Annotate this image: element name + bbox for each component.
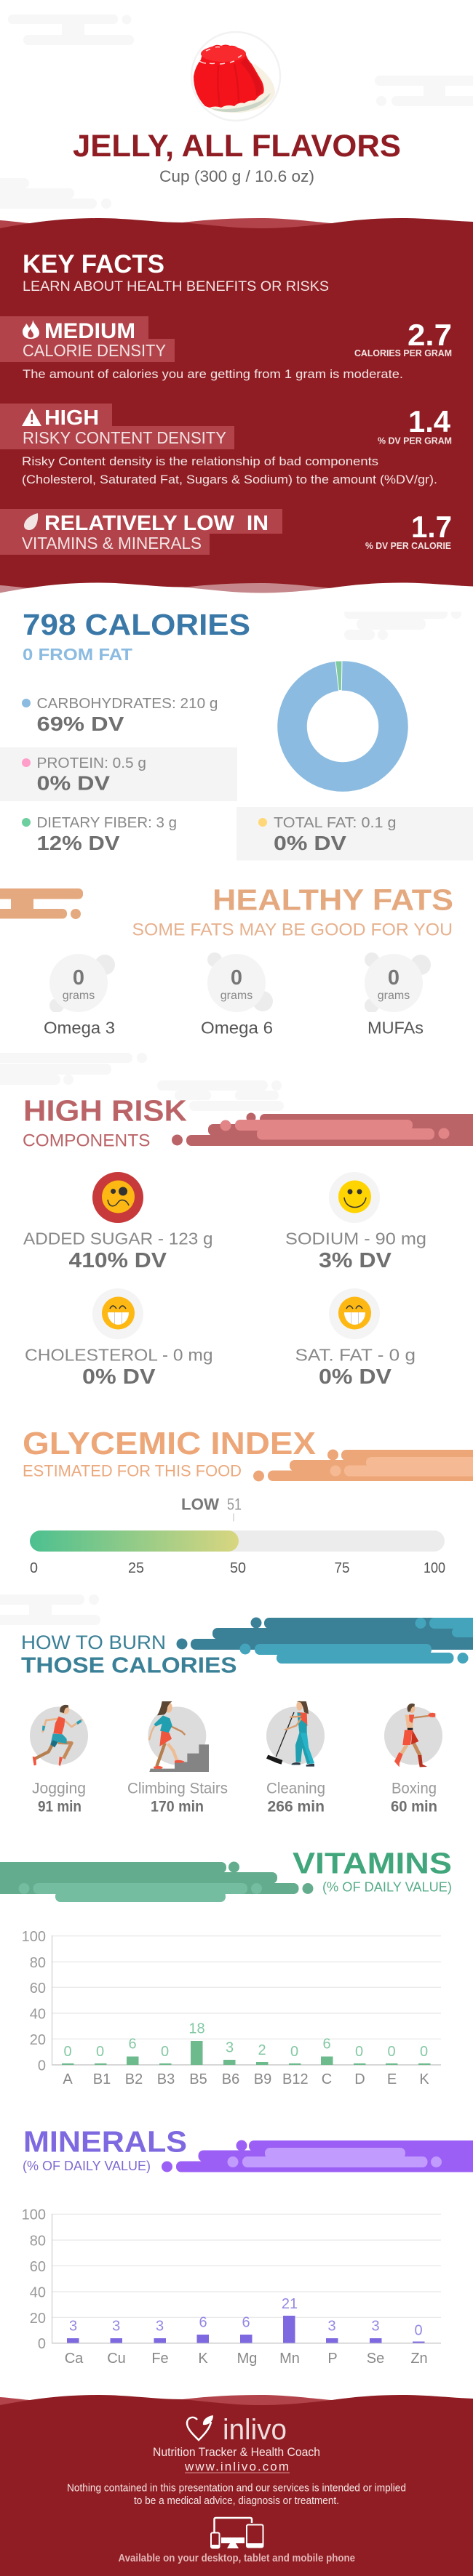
fact: risky content density: HIGH (44, 406, 99, 430)
panel: footer (0, 2395, 473, 2576)
gauge: glycemic value: 0 (30, 1560, 38, 1576)
fact: calorie density: CALORIES PER GRAM (354, 348, 452, 358)
bar chart: minerals: 100 (22, 2207, 46, 2223)
stat: omega 6 (201, 952, 273, 1037)
bar chart: vitamins: 0 (38, 2058, 46, 2074)
macro: total fat: TOTAL FAT: 0.1 g (274, 815, 396, 831)
activity: jogging: 91 min (38, 1799, 82, 1815)
panel: footer: Available on your desktop, tablet and mobile phone (118, 2552, 355, 2564)
bar chart: vitamins: 0 (420, 2044, 428, 2060)
bar chart: minerals: Fe (151, 2351, 169, 2367)
macro: total fat (236, 807, 473, 861)
fact: risky content density: RISKY CONTENT DENSITY (23, 428, 226, 447)
bar chart: minerals: 3 (69, 2318, 77, 2334)
panel: key facts (0, 218, 473, 612)
bar chart: vitamins: 0 (161, 2044, 169, 2060)
bar chart: vitamins: 60 (30, 1981, 46, 1997)
bar chart: vitamins: B12 (282, 2071, 309, 2087)
bar chart: vitamins: A (63, 2071, 73, 2087)
bar chart: vitamins: 2 (258, 2042, 266, 2058)
bar chart: vitamins: 0 (355, 2044, 363, 2060)
activity: climbing stairs: Climbing Stairs (127, 1780, 228, 1797)
bar chart: vitamins: 0 (63, 2044, 72, 2060)
gauge: glycemic value: 51 (227, 1495, 242, 1514)
macro: carbohydrates (22, 696, 218, 735)
fact: risky content density: % DV PER GRAM (378, 435, 452, 446)
bar chart: vitamins: B6 (222, 2071, 239, 2087)
banner blob (0, 888, 83, 919)
bar chart: minerals: 3 (156, 2318, 164, 2334)
panel: calories: 798 CALORIES (23, 608, 250, 641)
activity: jogging (30, 1705, 88, 1815)
banner blob (176, 1617, 473, 1664)
item: saturated fat: 0% DV (319, 1365, 392, 1389)
icon: warning triangle (22, 409, 41, 426)
fact: vitamins and minerals: RELATIVELY LOW IN (44, 512, 269, 535)
icon: laughing face (338, 1297, 371, 1329)
macro: protein (0, 747, 237, 801)
bar chart: minerals: Se (367, 2351, 384, 2367)
item: cholesterol: CHOLESTEROL - 0 mg (25, 1345, 212, 1364)
panel: high risk components (23, 1094, 473, 1389)
icon: heart with leaf (187, 2415, 213, 2440)
panel: minerals: MINERALS (23, 2124, 187, 2158)
donut chart (293, 661, 393, 777)
serving size: Cup (300 g / 10.6 oz) (159, 167, 314, 185)
panel: glycemic index: GLYCEMIC INDEX (23, 1426, 316, 1461)
item: cholesterol: 0% DV (82, 1365, 156, 1389)
bar chart: vitamins: B3 (157, 2071, 175, 2087)
gauge: glycemic value: 25 (128, 1560, 144, 1576)
bar chart: vitamins: 80 (30, 1955, 46, 1971)
bar chart: vitamins: 100 (22, 1929, 46, 1945)
item: saturated fat: SAT. FAT - 0 g (295, 1345, 416, 1364)
bar chart: minerals: Mg (237, 2351, 257, 2367)
subheading: LEARN ABOUT HEALTH BENEFITS OR RISKS (23, 278, 329, 294)
banner blob (0, 1861, 313, 1902)
stat: omega 3: 0 (73, 966, 84, 990)
panel: footer: to be a medical advice, diagnosis or treatment. (134, 2495, 339, 2507)
bar chart: vitamins: E (387, 2071, 397, 2087)
stat: omega 6: Omega 6 (201, 1018, 273, 1037)
gauge: glycemic value (30, 1495, 445, 1576)
fact: calorie density: The amount of calories you are getting from 1 gram is moderate. (23, 368, 403, 381)
fact: calorie density: 2.7 (408, 318, 452, 352)
panel: footer: www.inlivo.com (184, 2460, 289, 2473)
macro: carbohydrates: 69% DV (36, 713, 124, 735)
icon: leaf (24, 513, 38, 530)
bar chart: vitamins: 6 (128, 2036, 137, 2052)
activity: climbing stairs: 170 min (151, 1799, 204, 1815)
bar chart: minerals: Cu (107, 2351, 126, 2367)
gauge: glycemic value: 75 (335, 1560, 349, 1576)
panel: high risk components: HIGH RISK (23, 1094, 187, 1127)
icon: jogger (30, 1705, 88, 1766)
icon: woman on stairs (148, 1701, 209, 1772)
stat: omega 6: grams (220, 990, 253, 1002)
gauge: glycemic value: LOW (181, 1495, 219, 1514)
bar chart: minerals: 80 (30, 2234, 46, 2250)
fact: calorie density: CALORIE DENSITY (23, 341, 166, 360)
icon: woman sweeping (266, 1701, 325, 1767)
fact: vitamins and minerals: VITAMINS & MINERALS (22, 534, 202, 553)
stat: MUFAs: MUFAs (367, 1018, 424, 1037)
stat: omega 3 (44, 954, 115, 1037)
fact: risky content density: 1.4 (408, 404, 451, 438)
icon: sad face (102, 1181, 135, 1213)
stat: omega 3: Omega 3 (44, 1018, 115, 1037)
macro: dietary fiber: 12% DV (36, 832, 120, 854)
panel: healthy fats: SOME FATS MAY BE GOOD FOR YOU (132, 920, 453, 939)
panel: vitamins: (% OF DAILY VALUE) (322, 1880, 452, 1895)
panel: footer: Nothing contained in this presentation and our services is intended or implied (67, 2482, 406, 2494)
icon: laughing face (102, 1297, 135, 1329)
banner blob (172, 1112, 473, 1146)
fact: risky content density: (Cholesterol, Saturated Fat, Sugars & Sodium) to the amount (%DV/gr). (22, 473, 437, 486)
fact: vitamins and minerals: % DV PER CALORIE (365, 540, 451, 551)
bar chart: minerals: 3 (112, 2318, 120, 2334)
bar chart: vitamins: 0 (387, 2044, 396, 2060)
bar chart: vitamins: 6 (322, 2036, 331, 2052)
bar chart: minerals: 21 (282, 2296, 298, 2312)
activity: cleaning: 266 min (268, 1799, 325, 1815)
bar chart: minerals (22, 2207, 441, 2367)
fact: risky content density: Risky Content density is the relationship of bad components (22, 455, 378, 468)
stat: MUFAs: 0 (388, 966, 400, 990)
macro: protein: PROTEIN: 0.5 g (36, 755, 146, 771)
bar chart: minerals: 60 (30, 2259, 46, 2275)
item: saturated fat (295, 1288, 416, 1389)
icon: devices (211, 2518, 263, 2548)
gauge: glycemic value: 100 (424, 1560, 445, 1576)
panel: high risk components: COMPONENTS (23, 1131, 150, 1150)
macro: protein: 0% DV (36, 772, 110, 794)
panel: footer: Nutrition Tracker & Health Coach (153, 2445, 320, 2459)
activity: cleaning: Cleaning (266, 1780, 325, 1797)
bar chart: vitamins: C (322, 2071, 332, 2087)
panel: healthy fats (0, 883, 453, 1037)
item: sodium: SODIUM - 90 mg (285, 1229, 426, 1248)
panel: calories: 0 FROM FAT (23, 645, 132, 664)
bar chart: minerals: 0 (38, 2336, 46, 2352)
activity: cleaning (266, 1701, 325, 1815)
bar chart: minerals: 0 (414, 2322, 423, 2338)
fact: risky content density (0, 404, 452, 486)
bar chart: vitamins: 20 (30, 2032, 46, 2048)
bar chart: minerals: 40 (30, 2284, 46, 2300)
activity: climbing stairs (127, 1701, 228, 1815)
bar chart: vitamins: 3 (226, 2040, 234, 2056)
icon: jelly in circle (191, 32, 280, 121)
bar chart: vitamins: 0 (290, 2044, 298, 2060)
bar chart: minerals: 3 (371, 2318, 380, 2334)
panel: vitamins (0, 1847, 452, 2087)
title: JELLY, ALL FLAVORS (73, 129, 401, 164)
banner blob (253, 1450, 473, 1482)
item: sodium (285, 1172, 426, 1272)
activity: jogging: Jogging (32, 1780, 86, 1797)
panel: how to burn those calories (21, 1617, 473, 1815)
bar chart: minerals: P (327, 2351, 338, 2367)
panel: vitamins: VITAMINS (293, 1847, 452, 1880)
stat: MUFAs: grams (378, 990, 410, 1002)
item: added sugar: ADDED SUGAR - 123 g (23, 1229, 212, 1248)
item: sodium: 3% DV (319, 1249, 392, 1272)
bar chart: vitamins: D (354, 2071, 365, 2087)
bar chart: vitamins: B5 (189, 2071, 207, 2087)
stat: omega 3: grams (63, 990, 95, 1002)
macro: dietary fiber: DIETARY FIBER: 3 g (36, 815, 177, 831)
heading: key facts: KEY FACTS (23, 250, 164, 278)
macro: total fat: 0% DV (274, 832, 346, 854)
bar chart: minerals: Mn (279, 2351, 300, 2367)
fact: vitamins and minerals (0, 509, 452, 555)
banner blob (162, 2140, 473, 2172)
fact: calorie density: MEDIUM (44, 319, 135, 343)
activity: boxing: 60 min (391, 1799, 437, 1815)
item: cholesterol (25, 1288, 212, 1389)
panel: minerals (22, 2124, 473, 2367)
logo: inlivo (187, 2414, 287, 2446)
bar chart: minerals: 20 (30, 2311, 46, 2327)
bar chart: vitamins: B9 (254, 2071, 271, 2087)
bar chart: vitamins: B1 (93, 2071, 111, 2087)
icon: boxer (384, 1704, 442, 1767)
stat: MUFAs (365, 952, 431, 1037)
panel: glycemic index (23, 1426, 473, 1576)
icon: flame (23, 320, 39, 339)
panel: calories (0, 608, 473, 861)
item: added sugar: 410% DV (68, 1249, 167, 1272)
panel: glycemic index: ESTIMATED FOR THIS FOOD (23, 1461, 242, 1480)
bar chart: vitamins: 0 (96, 2044, 104, 2060)
activity: boxing: Boxing (391, 1780, 437, 1797)
activity: boxing (384, 1704, 442, 1815)
panel: how to burn those calories: HOW TO BURN (21, 1632, 166, 1653)
macro: dietary fiber (22, 815, 177, 854)
bar chart: minerals: Ca (65, 2351, 84, 2367)
bar chart: vitamins: 40 (30, 2007, 46, 2023)
panel: how to burn those calories: THOSE CALORIES (21, 1652, 237, 1678)
item: added sugar (23, 1172, 212, 1272)
icon: happy face (338, 1181, 371, 1213)
logo: inlivo: inlivo (223, 2414, 287, 2446)
bar chart: minerals: 6 (199, 2315, 207, 2331)
fact: vitamins and minerals: 1.7 (411, 510, 452, 544)
panel: healthy fats: HEALTHY FATS (212, 883, 453, 916)
panel: minerals: (% OF DAILY VALUE) (23, 2159, 151, 2173)
bar chart: minerals: 6 (242, 2315, 250, 2331)
bar chart: minerals: K (198, 2351, 208, 2367)
bar chart: vitamins (22, 1929, 441, 2087)
stat: omega 6: 0 (231, 966, 242, 990)
bar chart: minerals: 3 (327, 2318, 336, 2334)
gauge: glycemic value: 50 (230, 1560, 246, 1576)
bar chart: vitamins: K (419, 2071, 429, 2087)
fact: calorie density (0, 316, 452, 381)
bar chart: minerals: Zn (410, 2351, 428, 2367)
bar chart: vitamins: B2 (125, 2071, 143, 2087)
macro: carbohydrates: CARBOHYDRATES: 210 g (36, 696, 218, 712)
bar chart: vitamins: 18 (188, 2021, 205, 2037)
